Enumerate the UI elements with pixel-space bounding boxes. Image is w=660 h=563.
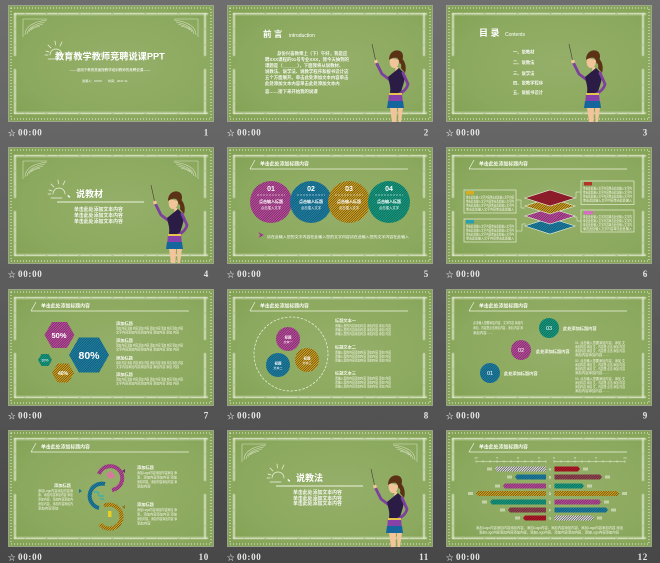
slide 1: cover (8, 6, 214, 122)
slide 12: butterfly bars (446, 430, 652, 546)
icon: left corner ornament (23, 19, 47, 37)
right text blocks: 添加内容添加内容…… (575, 352, 609, 357)
footer row 1: 1 (204, 128, 209, 138)
axis letters: F (549, 508, 551, 512)
slide heading: 单击此处添加标题内容 (260, 160, 309, 168)
axes: 40 (574, 458, 577, 460)
circle 04: 点击输入标题 (377, 198, 401, 204)
hexagon 40% (52, 364, 74, 382)
blue ring (90, 484, 105, 508)
section heading: 、说教法 (287, 472, 323, 483)
circle 04: 点击插入文字 (379, 205, 400, 210)
icon: sun (267, 464, 284, 482)
contents list: 一、说教材 (513, 48, 535, 56)
text box: upper left: 单击此处输入文字内容单击此处输入文字内 (466, 198, 514, 204)
list text: 添加 内容 添加 内容 添加 内容 添加 内容 添加 内容 添加 内容 (116, 376, 183, 382)
intro text: 添加，内容是点击添加内容，添加 内容 添 (473, 325, 523, 330)
intro text: 点击输入您要添加内容，文字内容 添加内 (473, 320, 523, 325)
footer row 1: 00:00 (18, 128, 42, 138)
footer row 3: 00:00 (18, 410, 42, 420)
list text: 请输入您的内容添加内容 添加内容 添加 内容 (335, 323, 392, 328)
slide 4: section teaching materials (8, 148, 214, 264)
cover subtitle: ——适用于教育类面授教学培训教师的竞聘说课—— (70, 67, 151, 72)
list text: 请输入您的内容添加内容 添加内容 添加 内容 (335, 350, 392, 354)
footer row 4: 00:00 (237, 552, 262, 562)
slide heading (469, 443, 627, 452)
foreword body text: 此处添加文本内容单击此处添加文本内 (265, 80, 340, 87)
footer row 2: 00:00 (237, 269, 262, 279)
hexagon 50% (44, 322, 74, 348)
slide 2: foreword (228, 6, 432, 122)
footer row 4 (8, 552, 648, 562)
list text: 请输入您的内容添加内容 添加内容 添加 内容 (335, 384, 392, 388)
circle two: 文本二 (273, 365, 283, 370)
footer row 2: ☆ (8, 270, 16, 279)
right text blocks: 添加内容 添加 文，内容是 点击 添加 内容 (575, 344, 625, 349)
icon: right corner ornament (174, 161, 198, 179)
axis letters: B (549, 476, 552, 480)
footer row 1: ☆ (227, 128, 235, 138)
right text blocks: 添加内容添加内容…… (575, 388, 609, 393)
text block: top right: 添加内容，添加内容添加内容 添 (137, 479, 177, 484)
presenter line: 讲课人：XXXX 时间：2017.11 (82, 78, 128, 83)
contents list (513, 48, 544, 96)
icon: pointer left (79, 489, 82, 493)
section text: 单击此处添加文本内容 (74, 212, 123, 219)
footer row 3: 00:00 (237, 410, 262, 420)
footer row 3: 7 (204, 410, 209, 420)
text box: lower right: 单击此处输入文字内容单击此处输入文字内 (583, 218, 632, 223)
footer row 2: 4 (204, 269, 209, 279)
axis letters: D (549, 492, 552, 496)
circle two: 标题 (275, 360, 282, 366)
contents english heading: Contents (505, 32, 526, 38)
slide heading: 单击此处添加标题内容 (41, 444, 90, 450)
list text: 添加标题 (116, 371, 134, 378)
list text: 添加 内容 添加 内容 添加 内容 添加 内容 添加 内容 添加 内容 (116, 326, 183, 330)
diamond stack (525, 190, 575, 234)
footer row 3: 8 (424, 410, 429, 420)
foreword heading: 前 言 (263, 29, 283, 39)
hexagon 30% (38, 354, 52, 366)
right text blocks: 添加内容 添加 文，内容是 点击 添加 内容 (575, 362, 625, 367)
hexagon 30%: 30% (41, 358, 49, 362)
hexagon 50%: 50% (51, 331, 67, 340)
circle 04: 04 (385, 186, 393, 193)
footer row 4: 11 (419, 552, 429, 562)
text block: top right: 添加标题 (137, 464, 155, 471)
icon: left corner ornament (242, 444, 266, 462)
list text: 文字内容添加内容添加内容 添加内容 添加 内容 (116, 364, 180, 369)
circle 01 (250, 181, 292, 223)
section text: 单击此处添加文本内容 (74, 206, 123, 213)
teacher figure (151, 185, 187, 263)
footer row 4: ☆ (446, 553, 454, 562)
text box: lower left: 单击此处输入文字内容单击此处输入文字内 (466, 228, 514, 232)
text block: bottom right: 添，添加内容添加内容 添加 (137, 512, 178, 516)
text box: upper left: 单击此处输入文字内容单击此处输入 (466, 206, 515, 212)
foreword body text: 容……接下来开始我的说课 (265, 88, 318, 95)
section text: 单击此处添加文本内容 (293, 500, 342, 507)
slide heading: 单击此处添加标题内容 (479, 444, 528, 450)
slide 5: four circles (228, 148, 432, 264)
text block: left: 添加标题 (54, 482, 72, 489)
text block: left: 添加内容，添加内容添加内 (38, 496, 74, 502)
circle 02: 点击输入标题 (299, 198, 323, 204)
text block: top right: 添，添加内容添加内容 添加 (137, 474, 178, 480)
circle one (276, 327, 300, 351)
footer row 1: ☆ (8, 128, 16, 138)
list text: 请输入您的内容添加内容 添加内容 添加 内容 (335, 331, 392, 336)
teacher figure (569, 44, 605, 122)
text block: bottom right: 添加内容，添加内容添加内容 添 (137, 516, 177, 521)
left bars (476, 466, 546, 520)
pink ring (99, 466, 122, 490)
icon: left corner ornament (23, 161, 47, 179)
axes: 100 (623, 458, 628, 460)
circle 01: 01 (267, 186, 275, 193)
right text blocks: 03. 点击输入您要添加内容，添加 文 (575, 376, 626, 381)
slide 3: contents (446, 6, 652, 122)
icon: sun (48, 180, 65, 198)
step 01: 此处添加标题内容 (504, 370, 538, 377)
circle 03: 点击输入标题 (337, 198, 361, 204)
footer row 3: ☆ (8, 412, 16, 420)
foreword body text: 五个方面展开。单击此处添加文本内容单击 (265, 74, 349, 81)
section text: 单击此处添加文本内容 (293, 495, 342, 502)
footer row 4: 10 (199, 552, 209, 562)
text box: upper left (464, 190, 516, 213)
list text: 文字内容添加内容添加内容 添加内容 添加 内容 (116, 380, 180, 386)
text block: bottom right: 添加标题 (137, 501, 155, 508)
axis letters (549, 468, 552, 520)
footer row 2: ☆ (446, 270, 454, 279)
footer row 2: 6 (643, 269, 648, 279)
slide 11: section teaching methods (228, 430, 432, 547)
circle 02: 02 (307, 186, 315, 193)
slide heading (31, 302, 189, 311)
footer row 1: 3 (643, 128, 648, 138)
step 02: 此处添加标题内容 (536, 348, 570, 355)
foreword body text: 身份兴奋教师上（下）午好，我是应 (277, 50, 348, 57)
foreword body text: 课题是（______），下面我将从说教材、 (265, 62, 343, 69)
text box: upper right: 单击此处输入文字内容单击此处输入文字内 (583, 186, 632, 190)
hexagon 40%: 40% (58, 371, 69, 377)
list text: 请输入您的内容添加内容 添加内容 添加 内容 (335, 354, 392, 358)
text box: lower left: 单击此处输入文字内容单击此处输入 (466, 236, 515, 240)
slide heading: 单击此处添加标题内容 (41, 302, 90, 310)
list text: 添加标题 (116, 354, 134, 362)
circle 04 (368, 181, 410, 223)
text box: upper right: 单击此处输入文字内容单击此处输入文字内 (583, 190, 632, 194)
footnote text: 添加Logo内容添加内容添加内容，添加Logo内容，添加内容添加内容，添加Logo内容添加内容 (479, 530, 620, 534)
footer row 4: ☆ (8, 553, 16, 562)
icon: pointer top (122, 469, 125, 473)
right text blocks: 01. 点击输入您要添加内容，添加 文 (575, 340, 626, 345)
list text: 文字内容添加内容添加内容 添加内容 添加 内容 (116, 330, 180, 334)
icon: right corner ornament (393, 444, 417, 462)
circle 01: 点击输入标题 (259, 198, 283, 204)
slide heading (469, 302, 627, 311)
teacher figure (372, 44, 408, 122)
axis letters: A (549, 468, 552, 472)
section rule (57, 202, 144, 203)
footer row 2: ☆ (227, 270, 235, 279)
slide 9: step circles (446, 290, 652, 406)
footer row 1: 00:00 (237, 128, 262, 138)
axes (474, 458, 628, 463)
axes: 70 (595, 458, 598, 460)
footer row 1: ☆ (446, 128, 454, 138)
slide 10: ring chain (8, 430, 214, 546)
list text: 添加 内容 添加 内容 添加 内容 添加 内容 添加 内容 添加 内容 (116, 342, 183, 348)
text block: left: 添加内容，添加内容添加内 (38, 501, 74, 506)
text box: lower right (581, 210, 634, 232)
text block: bottom right (137, 501, 178, 526)
foreword body text (265, 50, 350, 95)
axes: 10 (553, 458, 556, 460)
footer row 1: 00:00 (456, 128, 480, 138)
footnote text: 添加Logo内容添加内容添加内容，添加Logo内容，添加内容添加内容，添加Logo内容添加内容 添加 (476, 525, 624, 530)
text box: upper left: 单击此处输入文字内容单击此处输入文字内容 (466, 194, 514, 200)
section heading: 、说教材 (67, 188, 103, 199)
icon: right corner ornament (174, 19, 198, 37)
circle 02: 点击插入文字 (301, 205, 322, 210)
circle two (266, 353, 290, 377)
slide 7: hexagons (8, 290, 214, 406)
circle 02 (290, 181, 332, 223)
text block: top right: 添加Logo内容添加内容添加 添 (137, 470, 178, 475)
icon: sun (45, 41, 62, 59)
footnote text: 请在此输入您的文字内容在此输入您的文字内容请在此输入您的文字内容在此输入 (267, 234, 410, 239)
circle one: 标题 (285, 334, 292, 340)
step 02: 02 (518, 348, 524, 354)
hexagon 80%: 80% (78, 350, 100, 362)
hexagon 80% (69, 338, 109, 372)
axis letters: C (549, 484, 552, 488)
footer row 4: 12 (638, 552, 648, 562)
text box: lower left: 单击此处输入文字内容单击此处输入文字内 (466, 224, 514, 228)
slide heading: 单击此处添加标题内容 (260, 302, 309, 310)
yellow ring (100, 505, 121, 529)
text block: left (38, 482, 74, 510)
footer row 1 (8, 128, 648, 138)
text box: lower left: 单击此处输入文字内容单击此处输入文字内 (466, 232, 514, 236)
text box: upper left: 单击此处输入文字内容单击此处输入文字内 (466, 202, 514, 208)
list text: 文字内容添加内容添加内容 添加内容 添加 内容 (116, 346, 180, 352)
list text: 标题文本一 (335, 317, 357, 324)
footer row 2 (8, 269, 648, 279)
right text blocks: 添加内容添加内容…… (575, 370, 609, 375)
text box: upper right (581, 181, 634, 204)
text block: bottom right: 添加Logo内容添加内容添加 添 (137, 507, 178, 512)
teacher figure (371, 469, 407, 547)
section text: 单击此处添加文本内容 (74, 218, 123, 225)
connectors (516, 192, 581, 231)
contents list: 五、说板书设计 (513, 89, 544, 96)
axes: 70 (496, 458, 499, 460)
text box: lower right: 单击此处输入文字内容单击此处输入文字内 (583, 222, 632, 227)
axes: 40 (517, 458, 520, 460)
icon: arrow bullet (258, 232, 264, 238)
circle 01: 点击插入文字 (261, 205, 282, 210)
cover title: 教育教学教师竞聘说课PPT (55, 50, 165, 62)
text block: bottom right: 添加内容 (137, 520, 151, 526)
dashed ring (254, 317, 328, 391)
list text: 标题文本三 (335, 370, 356, 376)
step 03: 此处添加标题内容 (563, 325, 597, 332)
right text blocks: 添加内容 添加 文，内容是 点击 添加 内容 (575, 384, 625, 389)
contents list: 二、说教法 (513, 59, 535, 66)
foreword body text: 说教法、说学法、说教学程序和板书设计这 (265, 68, 349, 75)
circle three (295, 348, 319, 372)
footer row 3: ☆ (227, 412, 235, 420)
text block: left: 添，添加内容添加内容 添加 (38, 492, 74, 497)
step 03 (539, 318, 597, 338)
footer row 1: 2 (424, 128, 429, 138)
footnote text (476, 525, 624, 534)
right text blocks: 添加内容 添加 文，内容是 点击 添加 内容 (575, 380, 625, 385)
list text: 添加 内容 添加 内容 添加 内容 添加 内容 添加 内容 添加 内容 (116, 360, 183, 365)
step 01 (480, 363, 538, 383)
text block: top right (137, 464, 178, 488)
slide heading (469, 160, 627, 169)
list text: 添加标题 (116, 337, 134, 344)
text block: left: 添加Logo内容添加内容添 (38, 488, 74, 493)
right text blocks (575, 340, 626, 393)
slide heading: 单击此处添加标题内容 (479, 302, 528, 310)
slide heading (31, 443, 189, 452)
text box: lower left (464, 219, 516, 242)
circle three: 文本三 (302, 360, 312, 365)
text block: top right: 添加内容 (137, 484, 151, 488)
circle three: 标题 (304, 356, 311, 360)
axes: 100 (474, 458, 479, 460)
slide heading (250, 160, 408, 169)
footer row 3: ☆ (446, 412, 454, 420)
footer row 3: 00:00 (456, 410, 480, 420)
contents list: 四、说教学程序 (513, 80, 544, 86)
axis letters: G (549, 516, 552, 520)
list text: 请输入您的内容添加内容 添加内容 添加 内容 (335, 327, 392, 332)
list text: 请输入您的内容添加内容 添加内容 添加 内容 (335, 358, 392, 362)
step 03: 03 (546, 326, 552, 332)
list text: 标题文本二 (335, 344, 356, 350)
circle 03: 03 (345, 186, 353, 193)
slide 8: circles in dashed ring (228, 290, 432, 406)
icon: pointer bottom (122, 505, 125, 509)
footer row 2: 00:00 (456, 269, 480, 279)
footer row 4: 00:00 (456, 552, 480, 562)
text block: left: 添加内容添加 (38, 506, 59, 510)
right text blocks: 02. 点击输入您要添加内容，添加 文 (575, 358, 626, 363)
right text blocks: 添加内容 添加 文，内容是 点击 添加 内容 (575, 366, 625, 371)
list text: 添加标题 (116, 320, 134, 327)
axes: 10 (538, 458, 541, 460)
slide heading (250, 302, 408, 311)
section text (293, 489, 342, 507)
footer row 2: 00:00 (18, 269, 42, 279)
section rule (276, 486, 363, 487)
slide 6: layered diamonds (446, 148, 652, 264)
list text (116, 320, 183, 386)
section text (74, 206, 123, 225)
list text: 请输入您的内容添加内容 添加内容 添加 内容 (335, 380, 392, 384)
step 02 (511, 340, 570, 360)
axis letters: E (549, 500, 552, 504)
intro text: 添加内容…… (473, 330, 493, 335)
section text: 单击此处添加文本内容 (293, 489, 342, 496)
footer row 4: 00:00 (18, 552, 42, 562)
text box: upper right: 单击此处输入文字内容单击此处输入 (583, 198, 633, 202)
footer row 4: ☆ (227, 553, 235, 562)
slide heading: 单击此处添加标题内容 (479, 160, 528, 168)
value tags (468, 468, 627, 520)
circle 03: 点击插入文字 (339, 205, 360, 210)
footer row 2: 5 (424, 269, 429, 279)
text box: upper right: 单击此处输入文字内容单击此处输入文字内 (583, 194, 632, 198)
text box: lower right: 单击此处输入文字内容单击此处输入文字内 (583, 214, 632, 219)
list text (335, 317, 392, 388)
list text: 请输入您的内容添加内容 添加内容 添加 内容 (335, 376, 392, 380)
contents list: 三、说学法 (513, 70, 535, 77)
right bars (554, 466, 619, 520)
right text blocks: 添加内容 添加 文，内容是 点击 添加 内容 (575, 348, 625, 353)
text box: lower right: 单击此处输入文字内容单击此处输入 (583, 226, 633, 231)
foreword english heading: introduction (289, 33, 315, 39)
footer row 3 (8, 410, 648, 420)
intro text (473, 320, 523, 335)
circle 03 (328, 181, 370, 223)
step 01: 01 (487, 371, 493, 377)
footer row 3: 9 (643, 410, 648, 420)
circle one: 文本一 (283, 339, 293, 344)
contents heading: 目 录 (479, 27, 500, 38)
foreword body text: 聘XXX课程的01号专业XXX，我今天抽到的 (265, 56, 350, 63)
